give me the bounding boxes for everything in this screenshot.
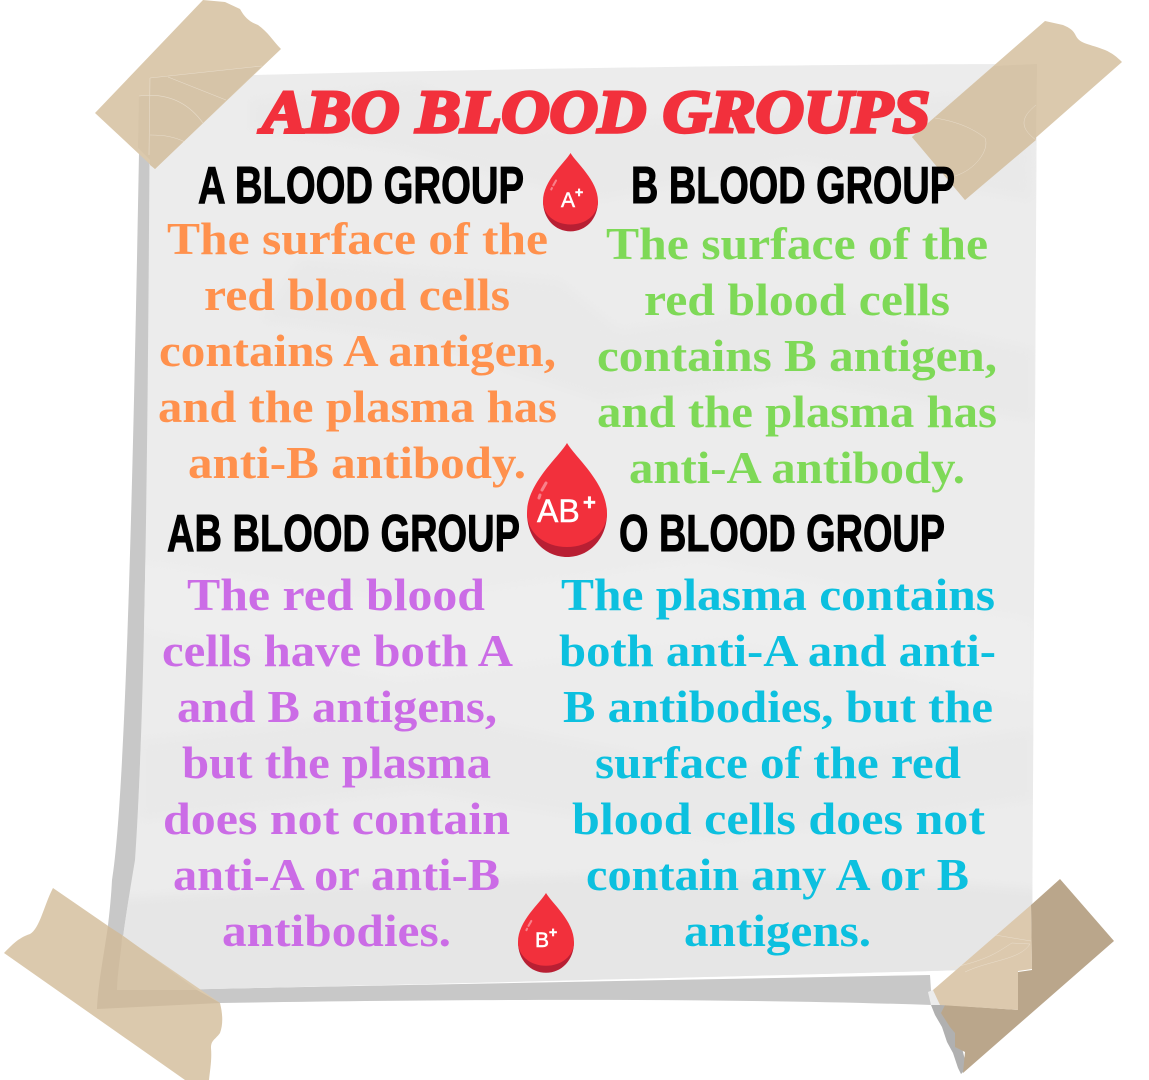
text block: AB blood group: antibodies.: [222, 905, 451, 956]
icon: B+ blood drop: [518, 893, 574, 973]
paper shadow: [97, 95, 967, 1074]
text block: O blood group: contain any A or B: [586, 849, 969, 900]
icon: A+ blood drop: +: [575, 184, 583, 200]
text block: A blood group: and the plasma has: [158, 381, 557, 432]
heading: AB blood group: AB BLOOD GROUP: [167, 505, 520, 563]
text block: O blood group: surface of the red: [595, 737, 961, 788]
text block: A blood group: anti-B antibody.: [188, 437, 526, 488]
icon: A+ blood drop: A: [561, 189, 575, 212]
text block: AB blood group: The red blood: [187, 569, 485, 620]
text block: O blood group: blood cells does not: [572, 793, 986, 844]
text block: AB blood group: but the plasma: [182, 737, 491, 788]
text block: A blood group: red blood cells: [204, 269, 510, 320]
text block: B blood group: red blood cells: [644, 274, 950, 325]
icon: B+ blood drop: +: [549, 924, 557, 940]
icon: B+ blood drop: B: [535, 929, 549, 952]
text block: A blood group: contains A antigen,: [159, 325, 556, 376]
icon: AB+ blood drop: +: [583, 490, 596, 515]
text block: AB blood group: cells have both A: [162, 625, 513, 676]
heading: O blood group: O BLOOD GROUP: [619, 505, 945, 563]
text block: AB blood group: does not contain: [163, 793, 510, 844]
text block: A blood group: The surface of the: [167, 213, 548, 264]
tape: bottom left: [4, 888, 222, 1080]
paper sheet: [100, 64, 1040, 1000]
text block: A blood group: [158, 213, 557, 488]
text block: AB blood group: and B antigens,: [177, 681, 497, 732]
text block: B blood group: The surface of the: [606, 218, 988, 269]
heading: A blood group: A BLOOD GROUP: [198, 157, 524, 215]
icon: A+ blood drop: [543, 153, 598, 231]
text block: O blood group: B antibodies, but the: [563, 681, 993, 732]
text block: O blood group: antigens.: [684, 905, 871, 956]
text block: B blood group: contains B antigen,: [597, 330, 997, 381]
text block: B blood group: anti-A antibody.: [629, 442, 965, 493]
heading: B blood group: B BLOOD GROUP: [631, 157, 955, 215]
tape: bottom right: [933, 879, 1114, 1073]
icon: AB+ blood drop: [527, 443, 607, 557]
title: ABO BLOOD GROUPS: [258, 79, 930, 145]
text block: O blood group: both anti-A and anti-: [559, 625, 996, 676]
text block: O blood group: The plasma contains: [561, 569, 995, 620]
text block: B blood group: [597, 218, 997, 493]
tape: top right: [912, 21, 1122, 200]
tape: top left: [95, 0, 281, 169]
text block: B blood group: and the plasma has: [597, 386, 997, 437]
icon: AB+ blood drop: AB: [537, 493, 580, 529]
text block: O blood group: [559, 569, 996, 956]
text block: AB blood group: [162, 569, 513, 956]
text block: AB blood group: anti-A or anti-B: [173, 849, 500, 900]
